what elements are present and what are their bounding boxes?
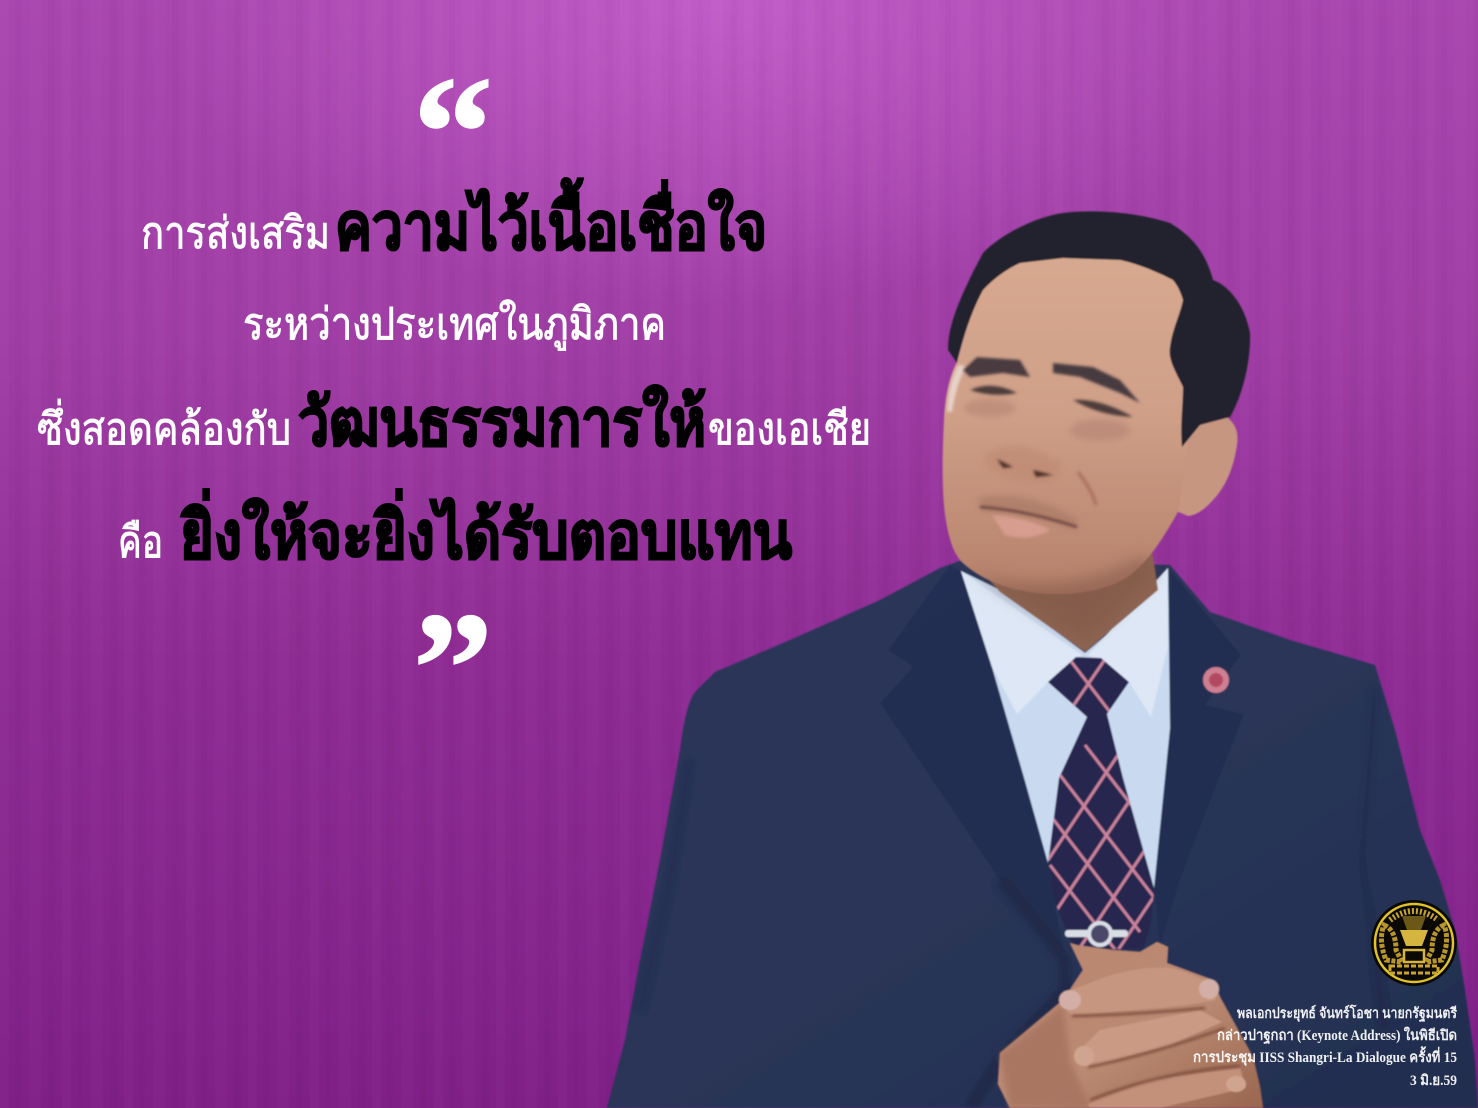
mouth — [978, 496, 1078, 538]
government seal — [1371, 900, 1457, 986]
nose — [985, 446, 1061, 483]
line 1: การส่งเสริม — [141, 209, 330, 258]
lapel pin — [1203, 667, 1229, 693]
right lapel — [1154, 570, 1244, 945]
suit jacket — [607, 560, 1478, 1108]
face — [943, 232, 1195, 594]
nasolabial fold — [1078, 472, 1096, 505]
hands — [998, 942, 1263, 1108]
facial features — [947, 357, 1155, 640]
finger creases — [1072, 1008, 1240, 1100]
palm shadow — [1000, 1005, 1090, 1108]
neck — [965, 552, 1158, 652]
collar left — [961, 571, 1082, 714]
line 4: คือ — [118, 518, 163, 567]
line 2: ระหว่างประเทศในภูมิภาค — [243, 299, 666, 351]
line 4: ยิ่งให้จะยิ่งได้รับตอบแทน — [180, 488, 792, 572]
caption: 3 มิ.ย.59 — [1410, 1072, 1457, 1089]
hair — [948, 211, 1250, 447]
necktie — [1048, 655, 1160, 962]
finger one — [1060, 968, 1218, 1015]
caption: กล่าวปาฐกถา (Keynote Address) ในพิธีเปิด — [1217, 1026, 1457, 1045]
line 3 — [37, 383, 871, 459]
portrait of speaker — [607, 211, 1478, 1108]
chin shadow — [975, 555, 1155, 640]
eyes — [970, 386, 1017, 395]
quote text — [37, 177, 871, 572]
line 3: ของเอเชีย — [708, 405, 871, 454]
tie clip — [1065, 923, 1128, 945]
collar right — [1088, 568, 1168, 717]
under-eye shading — [964, 399, 1016, 417]
finger three — [1088, 1068, 1246, 1108]
line 3: ซึ่งสอดคล้องกับ — [37, 398, 291, 454]
fingernails — [1059, 990, 1081, 1010]
forehead highlight — [947, 365, 966, 412]
caption — [1193, 1004, 1457, 1089]
caption: การประชุม IISS Shangri-La Dialogue ครั้งที่ 15 — [1193, 1046, 1457, 1066]
line 1: ความไว้เนื้อเชื่อใจ — [335, 177, 767, 263]
opening quotation mark: “ — [413, 43, 493, 221]
eyebrows — [963, 357, 1030, 377]
line 3: วัฒนธรรมการให้ — [298, 383, 706, 459]
seal emblem — [1381, 911, 1447, 973]
left lapel — [950, 566, 951, 567]
shirt — [961, 568, 1170, 888]
closing quotation mark: ” — [413, 579, 493, 757]
ear — [1174, 416, 1238, 516]
finger two — [1075, 1010, 1222, 1067]
line 1 — [141, 177, 767, 263]
